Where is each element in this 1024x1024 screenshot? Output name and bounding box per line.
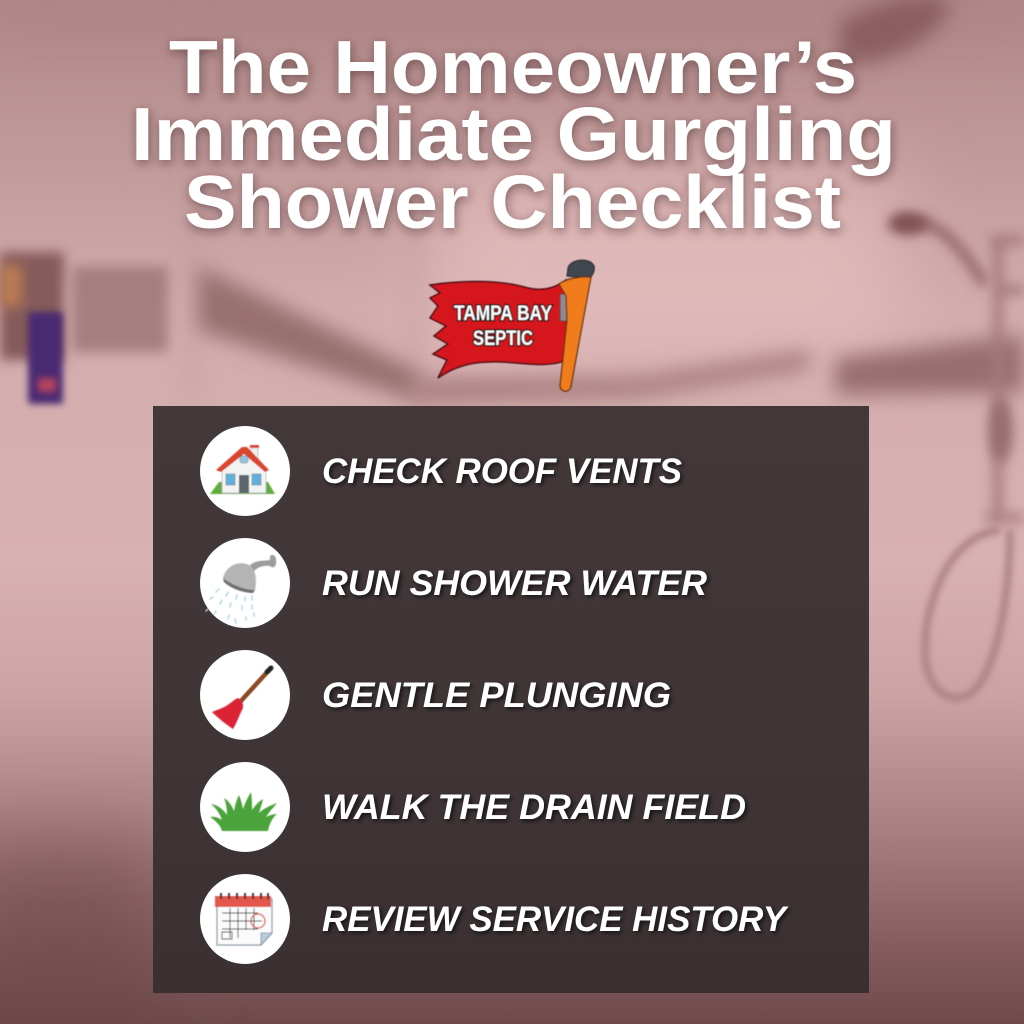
- icon: plunger: [212, 668, 271, 729]
- label: REVIEW SERVICE HISTORY: [322, 900, 789, 939]
- label: CHECK ROOF VENTS: [322, 452, 682, 491]
- icon: house: [210, 445, 275, 494]
- logo wordmark: [454, 302, 552, 350]
- icon: red flag: [430, 280, 567, 378]
- logo wordmark: TAMPA BAY: [454, 302, 552, 325]
- panel: checklist: [153, 406, 869, 993]
- label: WALK THE DRAIN FIELD: [322, 788, 746, 827]
- label: RUN SHOWER WATER: [322, 564, 708, 603]
- item: run shower water: [200, 538, 708, 628]
- icon: calendar: [215, 893, 272, 945]
- title: [131, 25, 896, 244]
- icon: grass: [210, 792, 277, 831]
- item: gentle plunging: [200, 650, 671, 740]
- icon: shower head: [206, 555, 276, 623]
- title: Immediate Gurgling: [131, 92, 896, 176]
- icon: orange pipe wrench: [559, 260, 594, 391]
- title: Shower Checklist: [184, 160, 841, 244]
- logo wordmark: SEPTIC: [473, 327, 533, 350]
- logo: Tampa Bay Septic: [430, 260, 594, 391]
- item: check roof vents: [200, 426, 682, 516]
- item: walk the drain field: [200, 762, 746, 852]
- label: GENTLE PLUNGING: [322, 676, 671, 715]
- title: The Homeowner’s: [169, 25, 857, 109]
- item: review service history: [200, 874, 789, 964]
